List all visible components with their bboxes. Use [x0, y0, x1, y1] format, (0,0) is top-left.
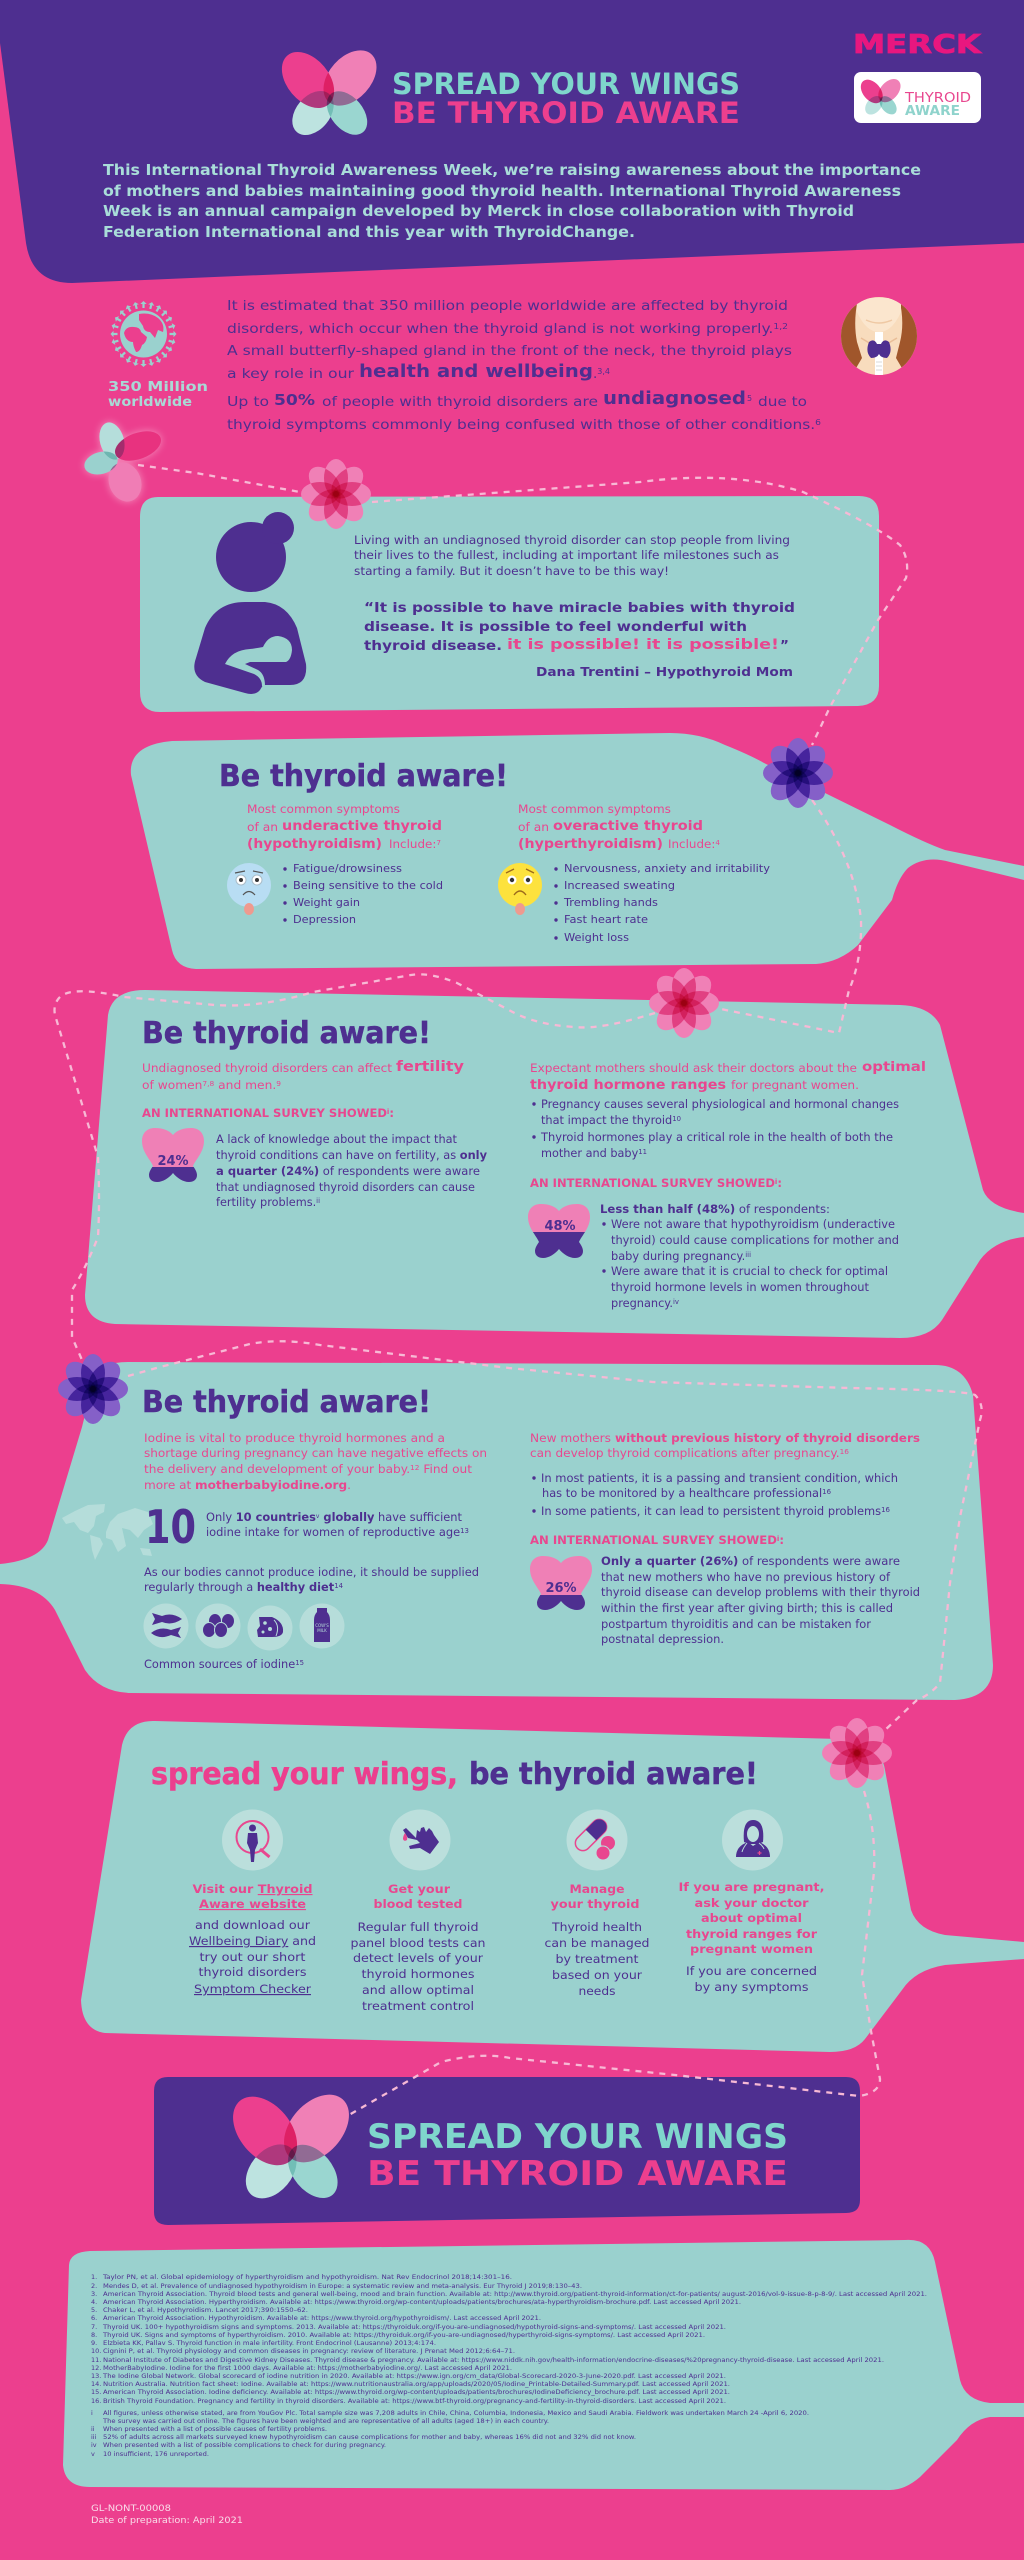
quote: it is possible! it is possible!	[507, 637, 779, 653]
subheading: survey: AN INTERNATIONAL SURVEY SHOWED	[142, 1106, 386, 1120]
list: overactive symptoms: Increased sweating	[564, 879, 675, 892]
list: overactive symptoms: Nervousness, anxiety and irritability	[564, 862, 771, 875]
column: manage thyroid: needs	[578, 1984, 616, 1998]
text: 48 percent: baby during pregnancy.	[611, 1249, 747, 1263]
list: overactive symptoms: Trembling hands	[563, 896, 658, 909]
subheading: survey: i	[775, 1178, 777, 1186]
icon: cheese	[248, 1606, 292, 1650]
list: overactive symptoms: Fast heart rate	[564, 913, 648, 926]
text: new mothers intro: can develop thyroid complications after pregnancy.	[530, 1446, 825, 1460]
text: numbered references: 11.	[91, 2356, 101, 2364]
text: numbered references: 8.	[91, 2331, 97, 2339]
column: manage thyroid: by treatment	[556, 1952, 639, 1966]
icon: purple flower 4	[58, 1354, 128, 1424]
intro text: This International Thyroid Awareness Week, we’re raising awareness about the importance	[103, 161, 921, 179]
list: underactive symptoms: Fatigue/drowsiness	[293, 862, 402, 875]
text: survey footnotes: ii	[91, 2425, 95, 2433]
title: spread your wings: SPREAD YOUR WINGS	[392, 67, 740, 101]
icon: 24 percent butterfly	[142, 1128, 204, 1182]
text block: thyroid facts: undiagnosed	[603, 388, 746, 409]
icon: eggs	[196, 1604, 240, 1648]
column: overactive heading: 4	[715, 839, 721, 847]
text: 24 percent: a quarter (24%) of respondents were aware	[216, 1164, 480, 1178]
text: 48 percent: iii	[745, 1251, 751, 1259]
text: 26 percent: postnatal depression.	[601, 1632, 724, 1646]
text: survey footnotes: The survey was carried out online. The figures have been weighted and are representative of all adults (aged 18+) in each country.	[102, 2417, 549, 2425]
list: postpartum facts: 16	[881, 1506, 891, 1514]
text: 24 percent	[216, 1132, 487, 1209]
text: new mothers intro	[530, 1431, 920, 1460]
list: underactive symptoms	[283, 862, 443, 926]
text: ten countries: have sufficient	[378, 1510, 463, 1524]
intro text	[103, 161, 921, 241]
column: visit website: try out our short	[200, 1950, 306, 1964]
text: numbered references: American Thyroid Association. Thyroid blood tests and general well-being, mood and brain function. Available at: http://www.thyroid.org/patient-thyroid-information/ct-for-patients/ august-2016/vol-9-issue-8-p-8-9/. Last accessed April 2021.	[103, 2290, 927, 2298]
text: numbered references: 15.	[91, 2388, 101, 2396]
text: numbered references: 13.	[91, 2372, 101, 2380]
column: visit website: Symptom Checker	[194, 1982, 311, 1996]
text: hormone ranges intro: for pregnant women.	[731, 1078, 859, 1092]
text: numbered references: American Thyroid Association. Hypothyroidism. Available at: https://www.thyroid.org/hypothyroidism/. Last accessed April 2021.	[103, 2314, 541, 2322]
text: survey footnotes: All figures, unless otherwise stated, are from YouGov Plc. Total sample size was 7,208 adults in Chile, China, Columbia, Indonesia, Mexico and Saudi Arabia. Fieldwork was undertaken March 24 -April 6, 2020.	[103, 2409, 809, 2417]
text block: thyroid facts: 50%	[274, 391, 315, 409]
text: fertility intro: 7,8	[202, 1080, 214, 1088]
icon: mother and baby	[194, 512, 306, 694]
text: living with an undiagnosed disorder: their lives to the fullest, including at important life milestones such as	[354, 548, 779, 562]
text: fertility intro: and men.	[214, 1078, 276, 1092]
text: iodine intro: shortage during pregnancy can have negative effects on	[144, 1446, 487, 1460]
dotted flight path	[54, 465, 982, 2115]
text: fertility intro: Undiagnosed thyroid disorders can affect	[142, 1061, 393, 1075]
column: overactive heading	[518, 802, 721, 852]
column: manage thyroid: your thyroid	[550, 1897, 640, 1911]
text: numbered references: 10.	[91, 2347, 101, 2355]
text block: thyroid facts: 1,2	[773, 322, 788, 331]
icon: sad blue face	[227, 863, 271, 915]
subheading: survey: i	[387, 1108, 389, 1116]
text: 26 percent	[601, 1554, 920, 1646]
number: 10: 10	[145, 1500, 196, 1554]
text: 24 percent: fertility problems.	[216, 1195, 318, 1209]
list: underactive symptoms: Being sensitive to the cold	[293, 879, 443, 892]
text: numbered references: Taylor PN, et al. Global epidemiology of hyperthyroidism and hypothyroidism. Nat Rev Endocrinol 2018;14:301–16.	[102, 2273, 512, 2281]
column: visit website	[189, 1810, 316, 1996]
icon: purple flower 2	[763, 738, 833, 808]
text: 24 percent: thyroid conditions can have on fertility, as only	[216, 1148, 487, 1162]
text: ten countries	[206, 1510, 469, 1539]
intro text: of mothers and babies maintaining good thyroid health. International Thyroid Awareness	[103, 182, 901, 200]
icon: 24 percent butterfly: 24%	[157, 1154, 189, 1169]
text: survey footnotes: iii	[91, 2433, 97, 2441]
panel: quote	[140, 496, 879, 712]
column: visit website: thyroid disorders	[198, 1965, 306, 1979]
text: survey footnotes: v	[91, 2450, 95, 2458]
list: overactive symptoms	[554, 862, 771, 944]
text: numbered references: American Thyroid Association. Iodine deficiency. Available at: https://www.thyroid.org/wp-content/uploads/patients/brochures/IodineDeficiency_brochure.pdf. Last accessed April 2021.	[103, 2388, 730, 2396]
logo: thyroid aware badge	[854, 72, 981, 123]
subheading: survey: AN INTERNATIONAL SURVEY SHOWED	[530, 1176, 774, 1190]
column: underactive heading: of an	[247, 820, 278, 834]
column: blood test: detect levels of your	[353, 1951, 483, 1965]
panel: fertility and pregnancy	[85, 990, 1024, 1338]
logo: thyroid aware badge: AWARE	[905, 104, 960, 119]
column: overactive heading: overactive thyroid	[553, 818, 703, 834]
column: pregnant: If you are concerned	[686, 1964, 817, 1978]
column: underactive heading: Include:	[389, 837, 435, 851]
icon: pink flower 3	[649, 968, 719, 1038]
text: iodine intro: 12	[410, 1464, 419, 1472]
column: overactive heading: of an	[518, 820, 549, 834]
title: be thyroid aware: BE THYROID AWARE	[392, 96, 740, 130]
text: new mothers intro: without previous history of thyroid disorders	[615, 1431, 920, 1445]
header panel	[0, 0, 1024, 283]
text: living with an undiagnosed disorder	[354, 533, 790, 578]
text: 48 percent: pregnancy.	[611, 1296, 674, 1310]
subheading: survey: :	[777, 1176, 782, 1190]
list: postpartum facts: 16	[822, 1488, 832, 1496]
column: underactive heading: (hypothyroidism)	[247, 836, 382, 852]
footer: document code and date: Date of preparation: April 2021	[91, 2516, 243, 2526]
text block: thyroid facts	[227, 298, 821, 433]
text: survey footnotes: iv	[91, 2441, 97, 2449]
text: 48 percent: Were aware that it is crucial to check for optimal	[611, 1264, 888, 1278]
text: numbered references: Nutrition Australia. Nutrition fact sheet: Iodine. Available at: https://www.nutritionaustralia.org/app/uploads/2020/05/Iodine_Printable-Detailed-Summary.pdf. Last accessed April 2021.	[103, 2380, 730, 2388]
text: numbered references: 3.	[91, 2290, 97, 2298]
text block: thyroid facts: health and wellbeing	[359, 361, 593, 382]
text: new mothers intro: 16	[840, 1448, 850, 1456]
column: pregnant: by any symptoms	[694, 1980, 808, 1994]
icon: 26 percent butterfly	[530, 1556, 592, 1610]
icon: neck with thyroid	[840, 297, 917, 375]
text: new mothers intro: New mothers	[530, 1431, 611, 1445]
quote: “It is possible to have miracle babies with thyroid	[364, 600, 795, 616]
column: blood test	[350, 1810, 486, 2013]
intro text: Federation International and this year with ThyroidChange.	[103, 223, 635, 241]
text: numbered references: 7.	[91, 2323, 97, 2331]
text: living with an undiagnosed disorder: Living with an undiagnosed thyroid disorder can stop people from living	[354, 533, 790, 547]
text: 24 percent: A lack of knowledge about the impact that	[216, 1132, 457, 1146]
panel: symptoms	[131, 733, 1024, 969]
text: 26 percent: Only a quarter (26%) of respondents were aware	[601, 1554, 900, 1568]
text block: thyroid facts: A small butterfly-shaped gland in the front of the neck, the thyroid plays	[227, 343, 792, 359]
text: numbered references: Cignini P, et al. Thyroid physiology and common diseases in pregnancy: review of literature. J Prenat Med 2012;6:64–71.	[103, 2347, 515, 2355]
text: 26 percent: that new mothers who have no previous history of	[601, 1570, 891, 1584]
caption: common sources of iodine: 15	[295, 1659, 304, 1667]
list: postpartum facts: has to be monitored by a healthcare professional	[542, 1486, 825, 1500]
text: ten countries: Only 10 countries	[206, 1510, 317, 1524]
footer: document code and date	[91, 2504, 243, 2526]
text: ten countries: v	[316, 1513, 320, 1520]
column: blood test: Regular full thyroid	[358, 1920, 478, 1934]
text: iodine intro: Find out	[419, 1462, 473, 1476]
list: pregnancy facts: 10	[672, 1115, 681, 1123]
list: pregnancy facts	[532, 1097, 899, 1160]
icon: globe 350 million: 350 Million	[108, 380, 208, 395]
text: 26 percent: thyroid disease can develop problems with their thyroid	[601, 1585, 920, 1599]
column: manage thyroid: based on your	[552, 1968, 642, 1982]
icon: pink flower 5	[822, 1718, 892, 1788]
text: numbered references: 2.	[91, 2282, 97, 2290]
text: hormone ranges intro: thyroid hormone ranges	[530, 1077, 726, 1093]
text block: thyroid facts: of people with thyroid disorders are	[322, 394, 598, 410]
column: manage thyroid: Thyroid health	[551, 1920, 642, 1934]
text: 48 percent: iv	[673, 1298, 679, 1306]
heading: Be thyroid aware!	[219, 759, 508, 794]
heading: Be thyroid aware!	[142, 1385, 431, 1420]
quote: disease. It is possible to feel wonderful with	[364, 619, 747, 635]
banner: spread your wings	[154, 2077, 860, 2225]
quote	[364, 600, 795, 679]
icon: 26 percent butterfly: 26%	[545, 1581, 577, 1596]
icon: doctor	[722, 1810, 783, 1870]
icon: milk: MILK	[317, 1628, 327, 1633]
text: healthy diet: regularly through a healthy diet	[144, 1580, 335, 1594]
text: hormone ranges intro: Expectant mothers should ask their doctors about the	[530, 1061, 857, 1075]
text: numbered references: 16.	[91, 2397, 101, 2405]
subheading: survey: i	[777, 1535, 779, 1543]
text: iodine intro	[144, 1431, 487, 1492]
panel: actions	[81, 1721, 1024, 2052]
text block: thyroid facts: a key role in our	[227, 366, 355, 382]
text: healthy diet	[144, 1565, 479, 1594]
heading	[151, 1757, 758, 1792]
text: numbered references: 9.	[91, 2339, 97, 2347]
quote: thyroid disease.	[364, 638, 502, 654]
text: numbered references: MotherBabyIodine. Iodine for the first 1000 days. Available at: https://motherbabyiodine.org/. Last accessed April 2021.	[103, 2364, 512, 2372]
list: postpartum facts: In most patients, it is a passing and transient condition, which	[541, 1471, 898, 1485]
column: blood test: Get your	[388, 1882, 450, 1896]
column: visit website: Wellbeing Diary and	[189, 1934, 316, 1948]
footer: document code and date: GL-NONT-00008	[91, 2504, 171, 2514]
column: visit website: Aware website	[199, 1897, 306, 1911]
logo: butterfly	[271, 40, 387, 143]
list: pregnancy facts: 11	[638, 1148, 647, 1156]
title: be thyroid aware: BE THYROID AWARE	[367, 2154, 788, 2194]
panel: iodine and new mothers	[0, 1362, 993, 1700]
list: pregnancy facts: Pregnancy causes several physiological and hormonal changes	[541, 1097, 899, 1111]
text: numbered references: Mendes D, et al. Prevalence of undiagnosed hypothyroidism in Europe: a systematic review and meta-analysis. Eur Thyroid J 2019;8:130–43.	[103, 2282, 582, 2290]
text: numbered references	[91, 2273, 927, 2405]
text: 48 percent: Were not aware that hypothyroidism (underactive	[611, 1217, 895, 1231]
icon: milk: COW'S	[315, 1623, 329, 1628]
text: hormone ranges intro	[530, 1059, 926, 1093]
subheading: survey: AN INTERNATIONAL SURVEY SHOWED	[530, 1533, 774, 1547]
list: pregnancy facts: that impact the thyroid	[541, 1113, 674, 1127]
text: fertility intro	[142, 1059, 464, 1092]
column: manage thyroid: can be managed	[544, 1936, 650, 1950]
text: 26 percent: within the first year after giving birth; this is called	[601, 1601, 893, 1615]
list: postpartum facts	[532, 1471, 898, 1518]
list: pregnancy facts: Thyroid hormones play a critical role in the health of both the	[540, 1130, 893, 1144]
icon: world map	[62, 1504, 153, 1560]
text block: thyroid facts: 5	[747, 394, 752, 403]
icon: 48 percent butterfly: 48%	[544, 1219, 576, 1234]
text: survey footnotes: 10 insufficient, 176 unreported.	[103, 2450, 209, 2458]
heading: spread your wings,	[151, 1757, 458, 1792]
text: living with an undiagnosed disorder: starting a family. But it doesn’t have to be this way!	[354, 564, 669, 578]
icon: globe 350 million	[108, 301, 208, 410]
text: survey footnotes: 52% of adults across all markets surveyed knew hypothyroidism can cause complications for mother and baby, whereas 16% did not and 32% did not know.	[103, 2433, 636, 2441]
panel: references	[63, 2240, 1024, 2490]
column: manage thyroid	[544, 1810, 650, 1998]
column: underactive heading: underactive thyroid	[282, 818, 442, 834]
column: underactive heading: 7	[436, 839, 441, 847]
column: visit website: Visit our Thyroid	[192, 1882, 312, 1896]
column: pregnant: pregnant women	[690, 1942, 813, 1956]
text: 48 percent	[600, 1202, 899, 1310]
column: overactive heading: Most common symptoms	[518, 802, 671, 816]
column: underactive heading	[247, 802, 442, 852]
icon: fish	[144, 1604, 188, 1648]
quote: Dana Trentini – Hypothyroid Mom	[536, 664, 793, 679]
icon: pills	[566, 1810, 628, 1870]
logo: thyroid aware badge: THYROID	[904, 91, 971, 106]
icon: finger prick	[390, 1810, 450, 1870]
column: overactive heading: (hyperthyroidism)	[518, 836, 663, 852]
text: ten countries: iodine intake for women of reproductive age	[206, 1525, 462, 1539]
text: 26 percent: postpartum thyroiditis and can be mistaken for	[601, 1617, 871, 1631]
column: pregnant: about optimal	[701, 1911, 802, 1925]
column: blood test: blood tested	[374, 1897, 462, 1911]
text block: thyroid facts: disorders, which occur when the thyroid gland is not working properly.	[227, 321, 702, 337]
column: blood test: thyroid hormones	[362, 1967, 474, 1981]
logo: butterfly	[220, 2082, 362, 2208]
icon: globe 350 million: worldwide	[108, 395, 192, 410]
text: fertility intro: 9	[276, 1080, 281, 1088]
text: 24 percent: that undiagnosed thyroid disorders can cause	[216, 1180, 475, 1194]
text: numbered references: 14.	[91, 2380, 101, 2388]
column: blood test: and allow optimal	[362, 1983, 474, 1997]
column: blood test: panel blood tests can	[350, 1936, 486, 1950]
text: numbered references: Chaker L, et al. Hypothyroidism. Lancet 2017;390:1550–62.	[103, 2306, 308, 2314]
list: underactive symptoms: Depression	[293, 913, 356, 926]
caption: common sources of iodine: Common sources of iodine	[144, 1657, 297, 1671]
text: numbered references: Elzbieta KK, Pallav S. Thyroid function in male infertility. Front Endocrinol (Lausanne) 2013;4:174.	[103, 2339, 436, 2347]
logo: merck: MERCK	[853, 30, 982, 60]
column: pregnant: ask your doctor	[694, 1896, 809, 1910]
list: postpartum facts: In some patients, it can lead to persistent thyroid problems	[541, 1504, 883, 1518]
icon: milk	[300, 1604, 344, 1648]
text: iodine intro: more at motherbabyiodine.org .	[144, 1478, 351, 1492]
text: fertility intro: of women	[142, 1078, 199, 1092]
text block: thyroid facts: 3,4	[597, 367, 610, 376]
list: pregnancy facts: mother and baby	[541, 1146, 640, 1160]
icon: woman under magnifier	[222, 1810, 283, 1870]
intro text: Week is an annual campaign developed by Merck in close collaboration with Thyroid	[103, 202, 854, 220]
text: numbered references: 12.	[91, 2364, 101, 2372]
text block: thyroid facts: 6	[815, 418, 821, 427]
column: overactive heading: Include:	[668, 837, 714, 851]
text: numbered references: Thyroid UK. Signs and symptoms of hyperthyroidism. 2010. Available at: https://thyroiduk.org/if-you-are-undiagnosed/hyperthyroid-signs-symptoms/. Last accessed April 2021.	[102, 2331, 705, 2339]
text: 24 percent: ii	[316, 1197, 320, 1205]
icon: pink flower 1	[301, 459, 371, 529]
column: visit website: and download our	[195, 1918, 310, 1932]
heading: Be thyroid aware!	[142, 1016, 431, 1051]
text: healthy diet: 14	[334, 1582, 344, 1590]
text: survey footnotes	[91, 2409, 809, 2458]
subheading: survey: :	[389, 1106, 394, 1120]
text: 48 percent: thyroid) could cause complications for mother and	[611, 1233, 899, 1247]
text: numbered references: The Iodine Global Network. Global scorecard of iodine nutrition in 2020. Available at: https://www.ign.org/cm_data/Global-Scorecard-2020-3-June-2020.pdf. Last accessed April 2021.	[102, 2372, 726, 2380]
list: overactive symptoms: Weight loss	[564, 931, 629, 944]
text: iodine intro: Iodine is vital to produce thyroid hormones and a	[144, 1431, 445, 1445]
subheading: survey: :	[779, 1533, 784, 1547]
text: iodine intro: the delivery and development of your baby.	[144, 1462, 396, 1476]
icon: worried yellow face	[498, 863, 542, 915]
text: numbered references: 1.	[91, 2273, 97, 2281]
text: survey footnotes: When presented with a list of possible causes of fertility problems.	[103, 2425, 327, 2433]
text block: thyroid facts: due to	[758, 394, 807, 410]
list: underactive symptoms: Weight gain	[293, 896, 360, 909]
text: 48 percent: Less than half (48%) of respondents:	[600, 1202, 830, 1216]
icon: 48 percent butterfly	[528, 1204, 590, 1258]
text: numbered references: National Institute of Diabetes and Digestive Kidney Diseases. Thyroid disease & pregnancy. Available at: https://www.niddk.nih.gov/health-information/endocrine-diseases/%20pregnancy-thyroid-disease. Last accessed April 2021.	[103, 2356, 884, 2364]
column: blood test: treatment control	[362, 1999, 474, 2013]
text: hormone ranges intro: optimal	[862, 1059, 926, 1075]
text block: thyroid facts: thyroid symptoms commonly being confused with those of other conditions.	[227, 417, 742, 433]
text block: thyroid facts: Up to	[227, 394, 269, 410]
text: numbered references: 6.	[91, 2314, 97, 2322]
heading: be thyroid aware!	[469, 1757, 758, 1792]
text: ten countries: 13	[460, 1527, 469, 1535]
text: survey footnotes: When presented with a list of possible complications to check for during pregnancy.	[103, 2441, 386, 2449]
text: numbered references: British Thyroid Foundation. Pregnancy and fertility in thyroid disorders. Available at: https://www.btf-thyroid.org/pregnancy-and-fertility-in-thyroid-disorders. Last accessed April 2021.	[103, 2397, 726, 2405]
column: underactive heading: Most common symptoms	[247, 802, 400, 816]
column: manage thyroid: Manage	[570, 1882, 625, 1896]
text: fertility intro: fertility	[396, 1059, 464, 1075]
title: spread your wings: SPREAD YOUR WINGS	[367, 2117, 788, 2157]
text block: thyroid facts: It is estimated that 350 million people worldwide are affected by thyroid	[227, 298, 788, 314]
column: pregnant	[678, 1810, 824, 1994]
quote: ”	[780, 638, 789, 654]
text: survey footnotes: i	[91, 2409, 93, 2417]
text: ten countries: globally	[319, 1510, 375, 1524]
icon: flying butterfly	[82, 420, 165, 506]
column: pregnant: thyroid ranges for	[686, 1927, 817, 1941]
text: numbered references: Thyroid UK. 100+ hypothyroidism signs and symptoms. 2013. Available at: https://thyroiduk.org/if-you-are-undiagnosed/hypothyroid-signs-and-symptoms/. Last accessed April 2021.	[102, 2323, 726, 2331]
text: numbered references: American Thyroid Association. Hyperthyroidism. Available at: https://www.thyroid.org/wp-content/uploads/patients/brochures/ata-hyperthyroidism-brochure.pdf. Last accessed April 2021.	[103, 2298, 741, 2306]
column: pregnant: If you are pregnant,	[678, 1880, 824, 1894]
text block: thyroid facts: .	[593, 366, 597, 382]
text: numbered references: 5.	[91, 2306, 97, 2314]
text: numbered references: 4.	[91, 2298, 97, 2306]
text: healthy diet: As our bodies cannot produce iodine, it should be supplied	[144, 1565, 479, 1579]
text: 48 percent: thyroid hormone levels in women throughout	[611, 1280, 869, 1294]
